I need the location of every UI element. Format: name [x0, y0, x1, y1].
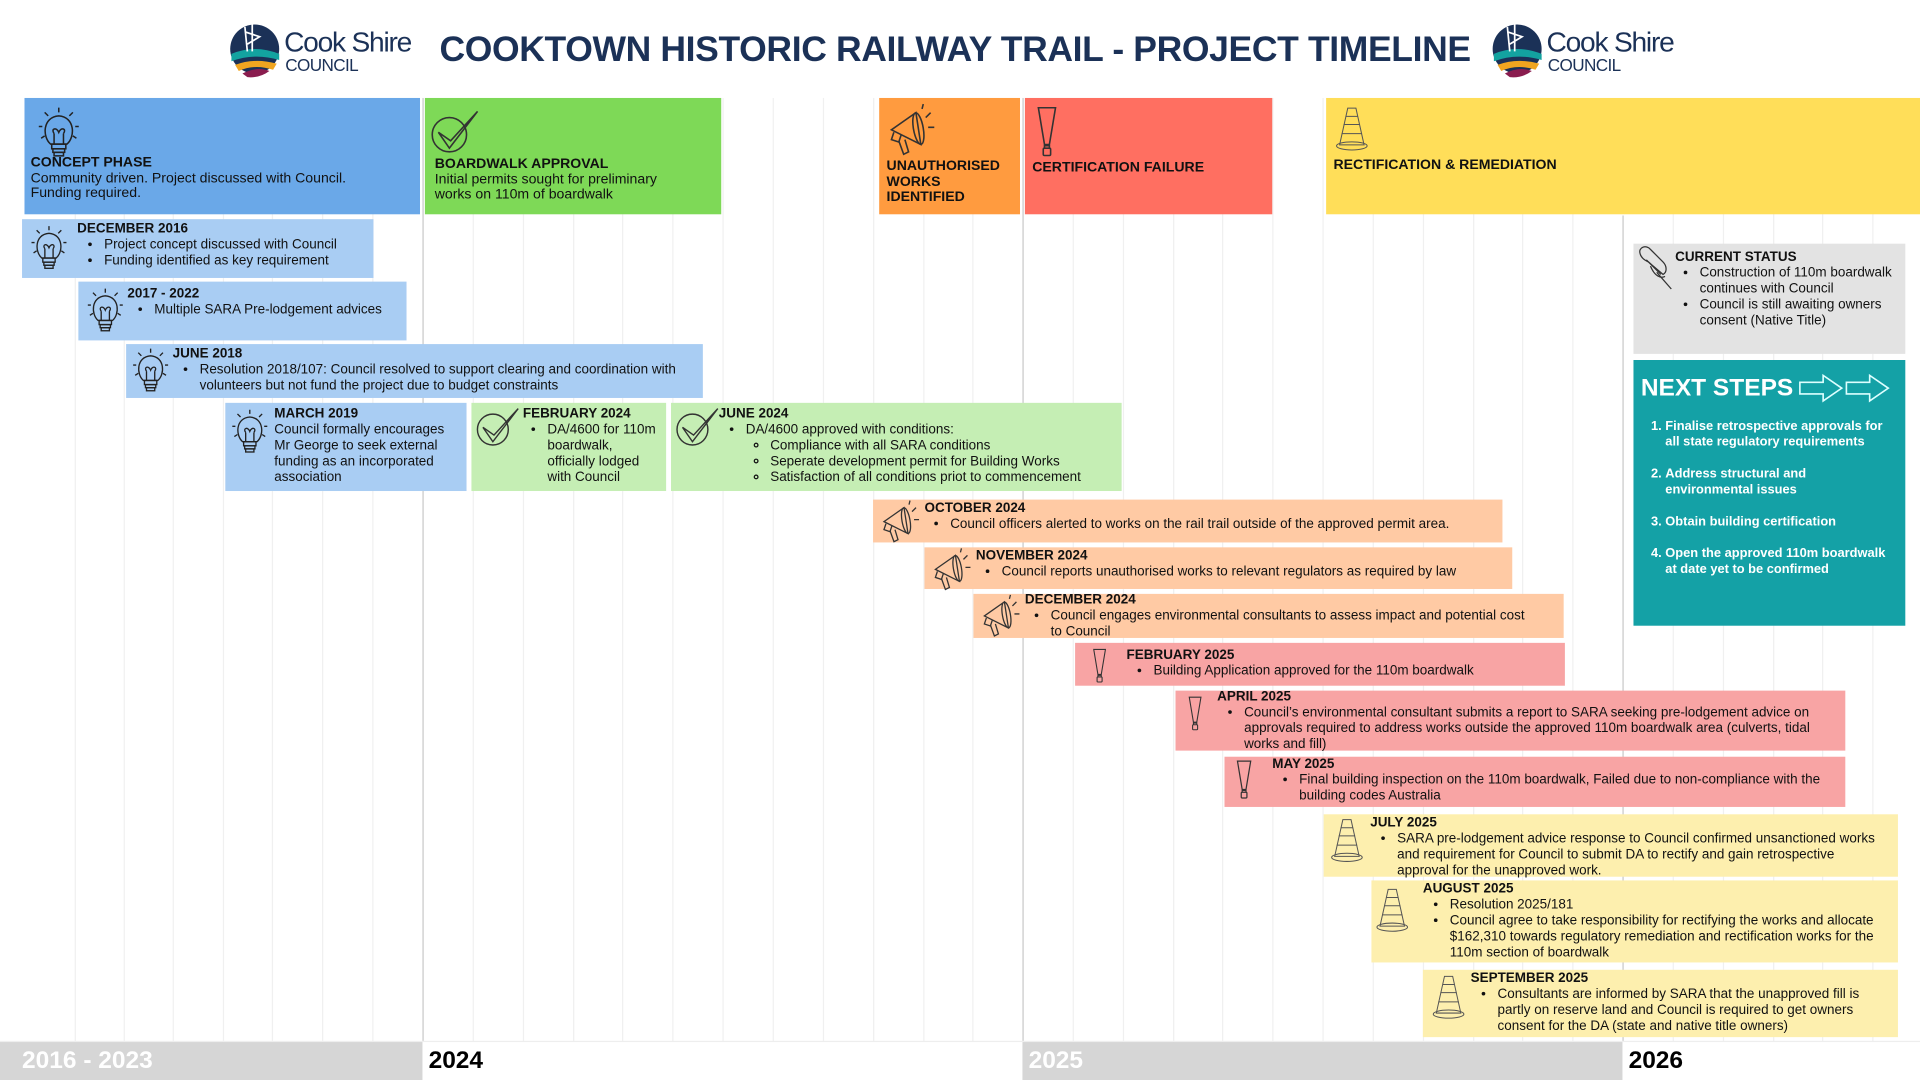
phase header: rectification: RECTIFICATION & REMEDIATION — [1333, 158, 1557, 173]
item: December 2016: Funding identified as key requirement — [104, 253, 329, 268]
phase header: certification failure — [1025, 98, 1272, 214]
item: August 2025: AUGUST 2025 — [1423, 882, 1513, 896]
item: March 2019: Council formally encourages Mr George to seek external funding as an incorporated association — [274, 422, 444, 485]
item: June 2018 — [126, 344, 703, 398]
item: August 2025: Resolution 2025/181 — [1450, 898, 1573, 912]
item: October 2024: Council officers alerted to works on the rail trail outside of the approved permit area. — [950, 517, 1449, 531]
item: November 2024: NOVEMBER 2024 — [976, 549, 1087, 563]
panel: current status: Construction of 110m boardwalk continues with Council — [1700, 266, 1892, 296]
phase header: concept: Funding required. — [31, 186, 141, 201]
item: 2017-2022: 2017 - 2022 — [127, 287, 199, 301]
phase header: certification failure: CERTIFICATION FAILURE — [1032, 160, 1204, 175]
logo left — [230, 24, 412, 78]
item: June 2024 — [671, 403, 1122, 491]
panel: next steps: Obtain building certification — [1665, 514, 1836, 529]
item: March 2019: MARCH 2019 — [274, 407, 358, 421]
panel: next steps: Open the approved 110m boardwalk at date yet to be confirmed — [1665, 546, 1885, 577]
panel: next steps: Address structural and environmental issues — [1665, 467, 1806, 497]
year axis: 2016 - 2023 — [22, 1047, 153, 1074]
panel: next steps: Finalise retrospective approvals for all state regulatory requirements — [1665, 419, 1883, 449]
item: June 2018: Resolution 2018/107: Council resolved to support clearing and coordination with volunteers but not fund the project due to budget constraints — [200, 362, 676, 393]
item: February 2025: FEBRUARY 2025 — [1127, 648, 1234, 662]
item: June 2024: Compliance with all SARA conditions — [770, 438, 990, 453]
item: June 2024: JUNE 2024 — [719, 407, 788, 421]
item: December 2016: DECEMBER 2016 — [77, 222, 188, 236]
phase header: unauthorised works: IDENTIFIED — [887, 190, 965, 204]
phase header: concept: CONCEPT PHASE — [31, 156, 152, 170]
item: May 2025 — [1224, 757, 1845, 807]
item: August 2025 — [1371, 880, 1898, 962]
item: 2017-2022 — [78, 282, 407, 340]
item: June 2018: JUNE 2018 — [173, 347, 242, 361]
phase header: boardwalk approval — [425, 98, 721, 214]
phase header: rectification — [1326, 98, 1920, 214]
item: February 2024 — [471, 403, 666, 491]
year axis: 2026 — [1629, 1047, 1683, 1074]
item: April 2025 — [1176, 691, 1845, 751]
item: June 2024: Seperate development permit for Building Works — [770, 454, 1060, 469]
panel: current status — [1633, 244, 1905, 354]
title: COOKTOWN HISTORIC RAILWAY TRAIL - PROJECT TIMELINE — [439, 31, 1471, 70]
item: September 2025: Consultants are informed by SARA that the unapproved fill is partly on reserve land and Council is required to get owners consent for the DA (state and native title owners) — [1498, 987, 1859, 1033]
item: April 2025: Council’s environmental consultant submits a report to SARA seeking pre-lodgement advice on approvals required to address works outside the approved 110m boardwalk area (culverts, tidal works and fill) — [1244, 705, 1810, 752]
phase header: concept: Community driven. Project discussed with Council. — [31, 171, 346, 186]
phase header: concept — [24, 98, 420, 214]
panel: current status: CURRENT STATUS — [1675, 250, 1797, 264]
item: July 2025 — [1324, 814, 1898, 877]
item: May 2025: Final building inspection on the 110m boardwalk, Failed due to non-compliance with the building codes Australia — [1299, 773, 1820, 803]
item: June 2024: Satisfaction of all conditions priot to commencement — [770, 470, 1081, 485]
item: 2017-2022: Multiple SARA Pre-lodgement advices — [154, 302, 382, 317]
panel: next steps: NEXT STEPS — [1641, 375, 1793, 402]
phase header: unauthorised works — [879, 98, 1020, 214]
item: September 2025 — [1423, 970, 1898, 1037]
item: December 2024: DECEMBER 2024 — [1025, 593, 1136, 607]
year axis: 2024 — [429, 1047, 483, 1074]
item: February 2025: Building Application approved for the 110m boardwalk — [1153, 664, 1474, 678]
item: October 2024: OCTOBER 2024 — [924, 501, 1025, 516]
phase header: unauthorised works: UNAUTHORISED — [887, 159, 1000, 174]
item: February 2024: DA/4600 for 110m boardwalk, officially lodged with Council — [547, 422, 656, 485]
phase header: boardwalk approval: Initial permits sought for preliminary — [435, 172, 657, 187]
item: July 2025: JULY 2025 — [1370, 816, 1437, 830]
item: December 2016: Project concept discussed with Council — [104, 238, 337, 252]
phase header: unauthorised works: WORKS — [887, 174, 941, 189]
item: October 2024 — [873, 500, 1502, 542]
item: April 2025: APRIL 2025 — [1217, 689, 1291, 704]
year axis — [0, 1042, 1683, 1080]
item: February 2025 — [1075, 643, 1565, 686]
item: December 2016 — [22, 219, 373, 278]
item: November 2024: Council reports unauthorised works to relevant regulators as required by law — [1002, 564, 1456, 579]
item: May 2025: MAY 2025 — [1272, 757, 1334, 771]
year axis: 2025 — [1029, 1047, 1083, 1074]
item: February 2024: FEBRUARY 2024 — [523, 407, 631, 421]
phase header: boardwalk approval: works on 110m of boardwalk — [435, 187, 613, 202]
item: December 2024 — [973, 594, 1564, 638]
item: December 2024: Council engages environmental consultants to assess impact and potential cost to Council — [1051, 609, 1525, 639]
item: March 2019 — [225, 403, 467, 491]
item: August 2025: Council agree to take responsibility for rectifying the works and allocate $162,310 towards regulatory remediation and rectification works for the 110m section of boardwalk — [1450, 913, 1874, 960]
item: July 2025: SARA pre-lodgement advice response to Council confirmed unsanctioned works and requirement for Council to submit DA to rectify and gain retrospective approval for the unapproved work. — [1397, 831, 1875, 878]
item: September 2025: SEPTEMBER 2025 — [1471, 971, 1588, 986]
item: November 2024 — [924, 547, 1512, 589]
item: June 2024: DA/4600 approved with conditions: — [746, 422, 954, 437]
logo right — [1492, 24, 1674, 78]
panel: current status: Council is still awaiting owners consent (Native Title) — [1700, 298, 1882, 328]
panel: next steps — [1633, 360, 1905, 626]
phase header: boardwalk approval: BOARDWALK APPROVAL — [435, 157, 608, 171]
